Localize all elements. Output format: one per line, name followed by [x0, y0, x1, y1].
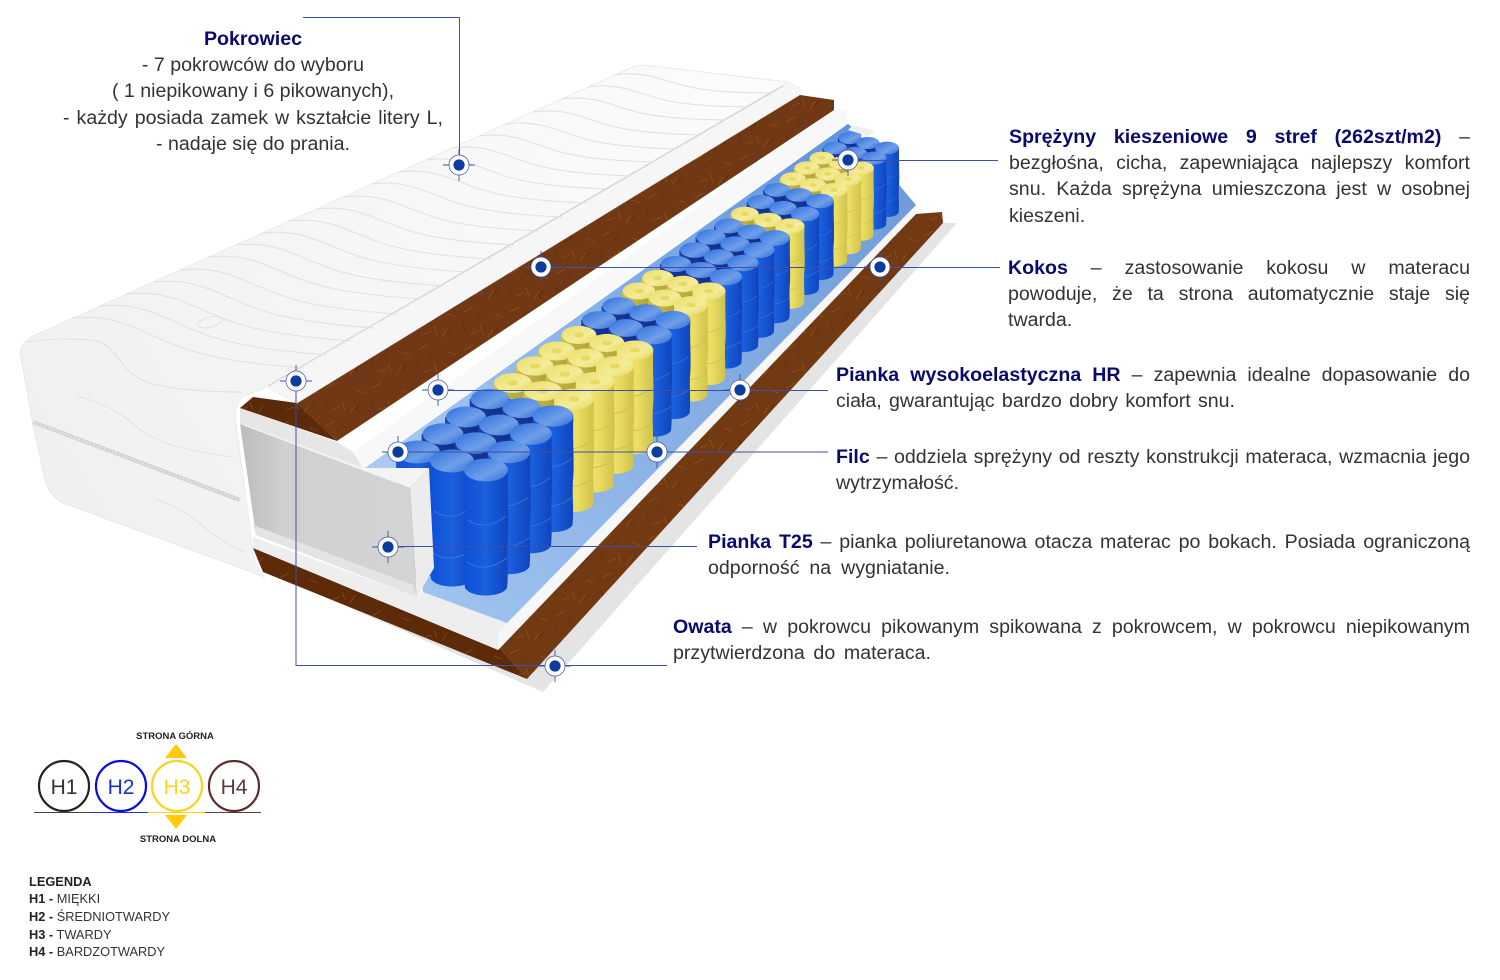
text: Pianka wysokoelastyczna HR: ciała, gwarantując bardzo dobry komfort snu.	[836, 390, 1235, 412]
text: Filc: Filc – oddziela sprężyny od reszty konstrukcji materaca, wzmacnia jego	[836, 446, 1470, 468]
text: Owata: Owata – w pokrowcu pikowanym spikowana z pokrowcem, w pokrowcu niepikowanym	[673, 616, 1470, 638]
firmness scale: H3	[164, 776, 190, 799]
top coconut layer	[240, 95, 834, 441]
white foam base and side rail	[253, 205, 916, 650]
text: Pokrowiec: ( 1 niepikowany i 6 pikowanych),	[112, 80, 394, 102]
text: Sprężyny kieszeniowe: bezgłośna, cicha, zapewniająca najlepszy komfort	[1009, 152, 1470, 174]
label: strona dolna: STRONA DOLNA	[140, 834, 216, 845]
pocket springs	[396, 132, 899, 595]
firmness scale: H1	[51, 776, 77, 799]
text: Sprężyny kieszeniowe	[1009, 126, 1470, 227]
text: Pianka T25	[708, 530, 1470, 579]
text: Kokos: Kokos – zastosowanie kokosu w materacu	[1008, 256, 1470, 278]
firmness scale: H2	[108, 776, 134, 799]
leader: Sprężyny	[832, 144, 998, 176]
legend: H4 - BARDZOTWARDY	[29, 944, 165, 959]
text: Pianka T25: Pianka T25 – pianka poliuretanowa otacza materac po bokach. Posiada ograniczoną	[708, 530, 1470, 552]
felt layer	[365, 124, 916, 623]
text: Pokrowiec: - nadaje się do prania.	[156, 133, 350, 155]
leader: Owata	[280, 365, 667, 682]
text: Sprężyny kieszeniowe: kieszeni.	[1009, 205, 1085, 227]
text: Pokrowiec: Pokrowiec	[204, 28, 302, 50]
bottom white base strip	[257, 223, 957, 692]
text: Pokrowiec	[63, 28, 443, 155]
text: Owata: przytwierdzona do materaca.	[673, 642, 931, 664]
HR foam layer	[240, 110, 848, 468]
legend: H2 - ŚREDNIOTWARDY	[29, 909, 170, 924]
leader: Kokos	[525, 251, 1000, 283]
text: Pianka wysokoelastyczna HR: Pianka wysokoelastyczna HR – zapewnia idealne dopasowanie do	[836, 364, 1470, 386]
legend: H1 - MIĘKKI	[29, 891, 100, 906]
text: Owata	[673, 616, 1470, 664]
legend: H3 - TWARDY	[29, 927, 112, 942]
legend: LEGENDA	[29, 874, 92, 888]
text: Pianka wysokoelastyczna HR	[836, 364, 1470, 412]
mattress cover	[20, 65, 800, 577]
text: Sprężyny kieszeniowe: Sprężyny kieszeniowe 9 stref (262szt/m2) –	[1009, 126, 1470, 148]
firmness scale: H4	[221, 776, 248, 799]
text: Filc	[836, 446, 1470, 494]
bottom coconut layer	[253, 212, 943, 679]
text: Pokrowiec: - 7 pokrowców do wyboru	[142, 54, 364, 76]
label: strona górna: STRONA GÓRNA	[136, 731, 214, 742]
text: Pokrowiec: - każdy posiada zamek w kształcie litery L,	[63, 107, 443, 129]
leader: Pianka T25	[372, 531, 697, 563]
leader: Pokrowiec	[303, 18, 475, 181]
firmness scale	[34, 744, 261, 829]
text: Filc: wytrzymałość.	[836, 472, 959, 494]
text: Kokos	[1008, 256, 1470, 331]
T25 side foam block	[240, 420, 434, 597]
legend	[29, 874, 170, 959]
text: Kokos: powoduje, że ta strona automatycznie staje się	[1008, 283, 1470, 305]
leader: Pianka HR	[422, 374, 828, 406]
text: Pianka T25: odporność na wygniatanie.	[708, 557, 950, 579]
leader: Filc	[382, 436, 828, 468]
text: Kokos: twarda.	[1008, 309, 1072, 331]
text: Sprężyny kieszeniowe: snu. Każda sprężyna umieszczona jest w osobnej	[1009, 178, 1470, 200]
